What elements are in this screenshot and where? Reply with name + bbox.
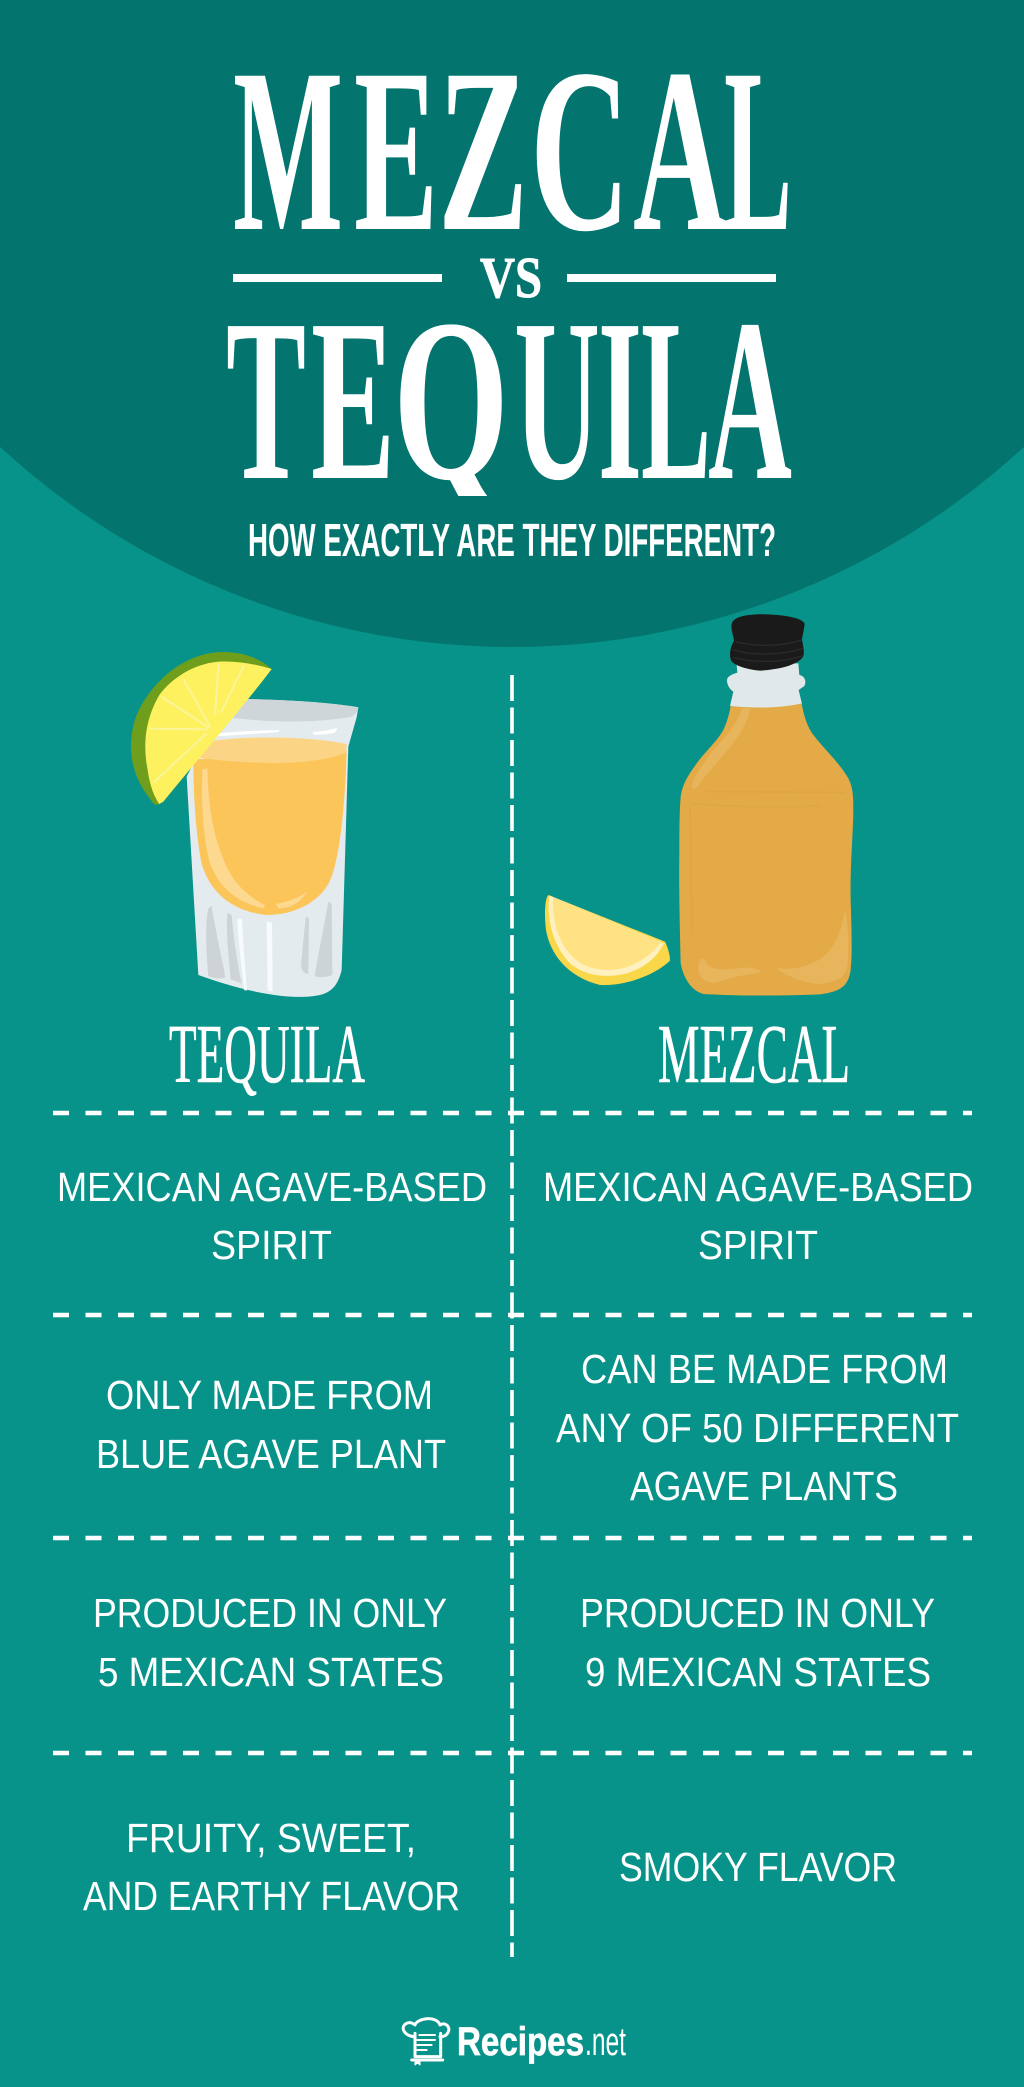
row 2 tequila text <box>96 1372 446 1477</box>
row 1 mezcal text <box>543 1164 973 1268</box>
row 2 mezcal text: ANY OF 50 DIFFERENT <box>556 1405 959 1451</box>
row 3 mezcal text: 9 MEXICAN STATES <box>585 1649 931 1695</box>
divider with vs: VS <box>480 245 542 310</box>
logo: Recipes.net: .net <box>585 2020 626 2064</box>
title: TEQUILA: A <box>708 272 792 529</box>
row 4 tequila text: AND EARTHY FLAVOR <box>83 1873 460 1919</box>
logo: Recipes.net <box>403 2019 626 2065</box>
text: L <box>724 20 792 280</box>
label: MEZCAL: MEZCAL <box>658 1008 850 1101</box>
divider with vs <box>233 245 776 310</box>
title: MEZCAL: Z <box>438 20 528 280</box>
row 1 tequila text: MEXICAN AGAVE-BASED <box>57 1164 487 1210</box>
row 3 tequila text: PRODUCED IN ONLY <box>93 1590 447 1636</box>
title: MEZCAL: M <box>233 20 343 280</box>
title: TEQUILA: E <box>311 272 395 529</box>
row 1 tequila text <box>57 1164 487 1268</box>
row 4 tequila text: FRUITY, SWEET, <box>126 1815 416 1861</box>
icon: mezcal bottle <box>545 614 853 996</box>
row 2 mezcal text: AGAVE PLANTS <box>630 1463 898 1509</box>
label: TEQUILA: TEQUILA <box>169 1008 365 1101</box>
row 2 mezcal text <box>556 1346 959 1509</box>
row 2 tequila text: BLUE AGAVE PLANT <box>96 1431 446 1477</box>
row 4 tequila text <box>83 1815 460 1919</box>
title: TEQUILA: L <box>641 272 711 529</box>
title: MEZCAL: C <box>530 20 630 280</box>
header dark circle <box>0 0 1024 647</box>
row 3 mezcal text <box>580 1590 935 1695</box>
title: TEQUILA: T <box>226 272 306 529</box>
row 1 mezcal text: SPIRIT <box>698 1222 818 1268</box>
logo: Recipes.net: Recipes <box>457 2020 584 2064</box>
row 3 tequila text <box>93 1590 447 1695</box>
title: TEQUILA: Q <box>393 272 509 529</box>
row 2 tequila text: ONLY MADE FROM <box>106 1372 433 1418</box>
title: TEQUILA: U <box>514 272 600 529</box>
icon: chef hat with recipe book <box>403 2019 449 2065</box>
title: MEZCAL: E <box>354 20 438 280</box>
icon: tequila shot glass with lime <box>131 652 358 997</box>
row 1 tequila text: SPIRIT <box>211 1222 332 1268</box>
horizontal dashed row dividers <box>53 1113 972 1753</box>
row 3 mezcal text: PRODUCED IN ONLY <box>580 1590 935 1636</box>
center vertical dashed divider <box>510 675 514 1957</box>
row 1 mezcal text: MEXICAN AGAVE-BASED <box>543 1164 973 1210</box>
title: MEZCAL: A <box>633 20 727 280</box>
row 4 mezcal text: SMOKY FLAVOR <box>619 1844 897 1890</box>
row 3 tequila text: 5 MEXICAN STATES <box>98 1649 444 1695</box>
row 2 mezcal text: CAN BE MADE FROM <box>581 1346 948 1392</box>
title: TEQUILA <box>228 324 792 496</box>
title: TEQUILA: I <box>598 272 642 529</box>
